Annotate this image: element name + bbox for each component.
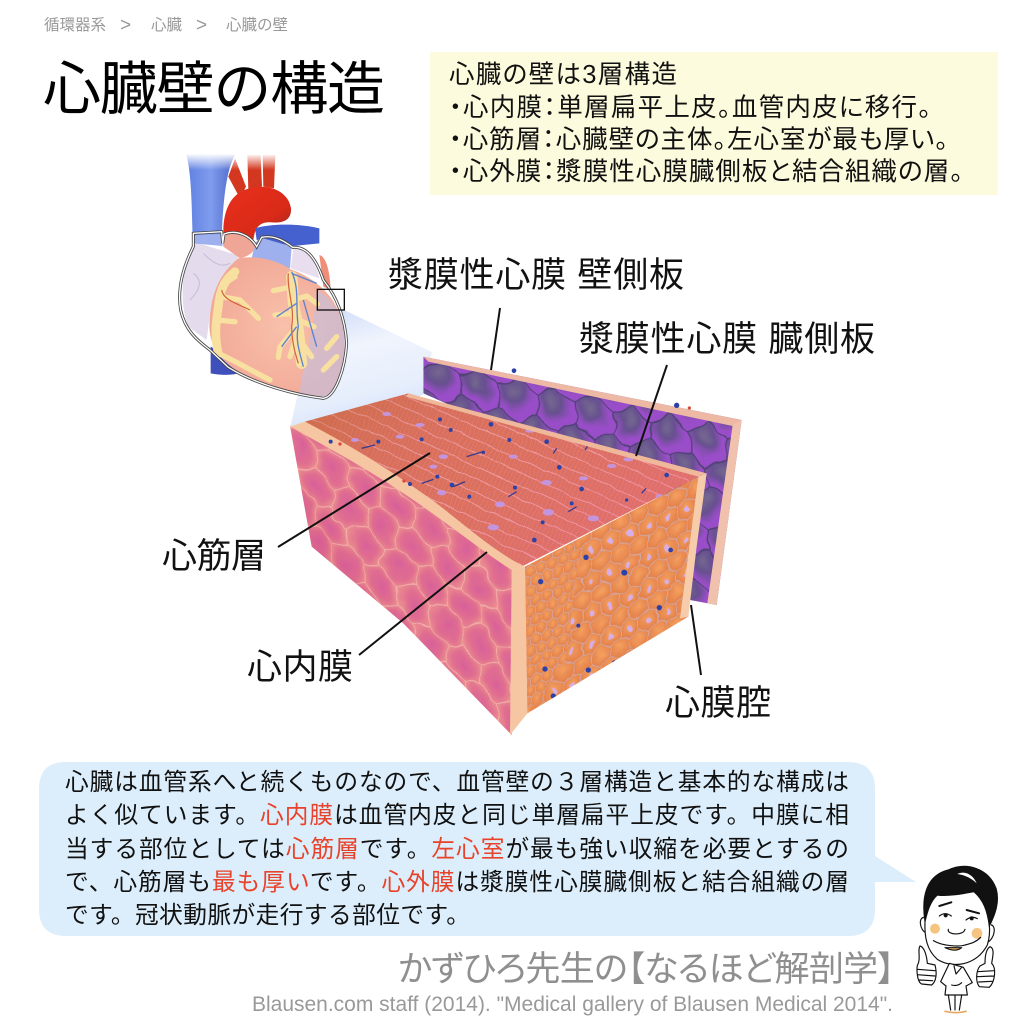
right hand — [977, 947, 995, 987]
vertical cream strip — [510, 567, 527, 735]
front cream strip — [290, 422, 525, 570]
summary box: ・心外膜：漿膜性心膜臓側板と結合組織の層。 — [449, 158, 963, 186]
heart illustration — [180, 147, 347, 398]
footer credit: かずひろ先生の【なるほど解剖学】 — [398, 950, 895, 989]
ears — [920, 917, 994, 943]
breadcrumb — [44, 15, 288, 36]
vena cava — [186, 152, 235, 237]
left face endocardium cells — [290, 426, 513, 735]
breadcrumb: 循環器系 — [44, 16, 106, 34]
ventricle — [209, 257, 345, 397]
top muscle fibres — [305, 393, 698, 566]
label: pericardial cavity: 心膜腔 — [665, 684, 771, 723]
coronary fat — [216, 272, 337, 380]
left atrium tip — [319, 255, 331, 290]
character: doctor thumbs up — [917, 866, 997, 1013]
parietal pericardium wall — [423, 356, 742, 605]
summary box — [430, 52, 998, 195]
label: visceral layer: 漿膜性心膜 臓側板 — [579, 320, 875, 359]
breadcrumb: 心臓 — [151, 16, 182, 34]
speech bubble — [39, 762, 916, 936]
right face cross section — [525, 476, 698, 714]
summary box: 心臓の壁は3層構造 — [449, 61, 677, 89]
label: myocardium — [162, 453, 430, 576]
bluish left side — [300, 290, 346, 397]
aortic branches — [228, 155, 275, 198]
label: parietal layer: 漿膜性心膜 壁側板 — [388, 256, 684, 295]
label: endocardium — [247, 552, 487, 687]
breadcrumb: 心臓の壁 — [226, 16, 288, 34]
pulmonary artery — [255, 225, 319, 246]
label: endocardium: 心内膜 — [247, 648, 353, 687]
label: visceral layer — [579, 320, 875, 456]
summary box: ・心内膜：単層扁平上皮。血管内皮に移行。 — [449, 94, 931, 122]
right cream edge — [680, 473, 707, 618]
speech bubble: 当する部位としては心筋層です。左心室が最も強い収縮を必要とするの — [65, 836, 849, 863]
source citation: Blausen.com staff (2014). "Medical gallery of Blausen Medical 2014". — [252, 993, 893, 1016]
eyes and mouth — [939, 902, 979, 913]
cheeks — [930, 924, 940, 934]
coronary vessels — [277, 272, 317, 367]
speech bubble: 心臓は血管系へと続くものなので、血管壁の３層構造と基本的な構成は — [65, 769, 849, 796]
summary box: ・心筋層：心臓壁の主体。左心室が最も厚い。 — [449, 126, 948, 154]
pericardium outline — [180, 232, 347, 398]
breadcrumb: > — [196, 15, 207, 36]
speech bubble: で、心筋層も最も厚いです。心外膜は漿膜性心膜臓側板と結合組織の層 — [65, 869, 849, 896]
upper vessel bases — [193, 234, 292, 268]
zoom box — [317, 289, 344, 310]
magnification beam — [290, 310, 432, 428]
face — [924, 890, 991, 965]
aorta — [223, 187, 291, 240]
left hand — [917, 946, 936, 985]
hair — [924, 866, 997, 926]
lower vena cava — [211, 347, 243, 375]
label: parietal layer — [388, 256, 684, 370]
label: pericardial cavity — [665, 605, 771, 723]
tissue block — [280, 347, 753, 743]
breadcrumb: > — [120, 15, 131, 36]
label: myocardium: 心筋層 — [162, 537, 266, 576]
back cream edge — [406, 393, 707, 477]
right atrium — [183, 242, 238, 340]
speech bubble: よく似ています。心内膜は血管内皮と同じ単層扁平上皮です。中膜に相 — [65, 802, 849, 829]
body — [941, 963, 972, 995]
title: 心臓壁の構造 — [43, 57, 385, 122]
speech bubble: です。冠状動脈が走行する部位です。 — [65, 902, 470, 929]
